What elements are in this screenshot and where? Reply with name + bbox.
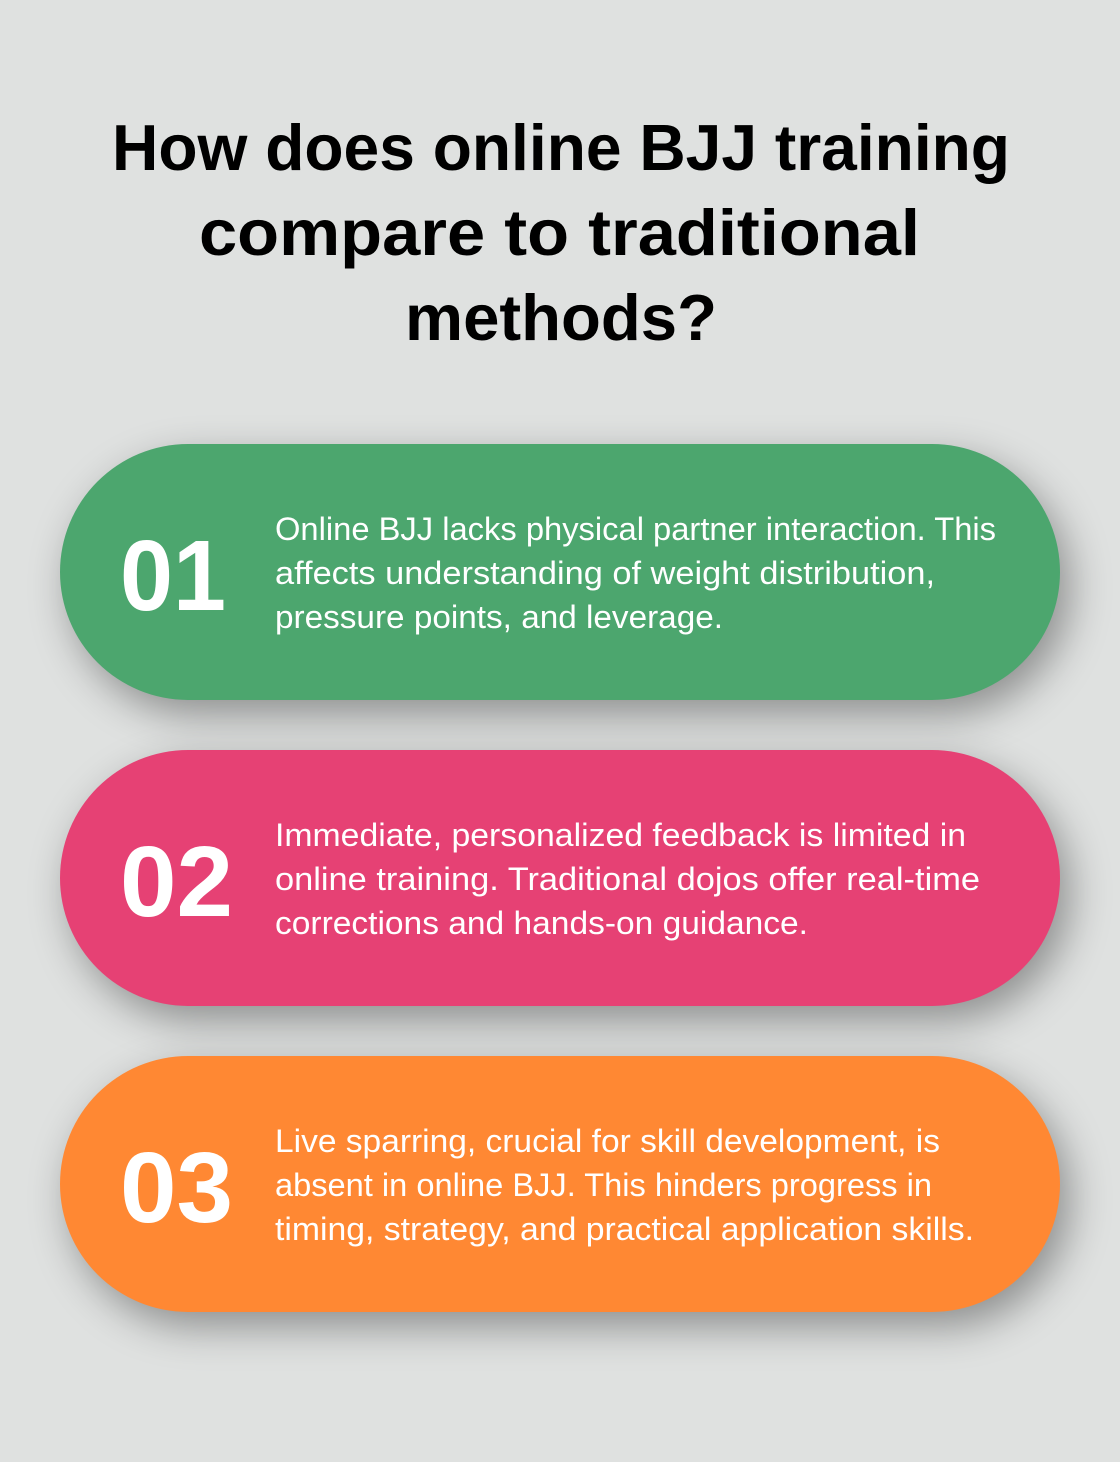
panel: card 03 <box>60 1056 1060 1312</box>
card 03 text: Live sparring, crucial for skill development, is <box>275 1123 940 1159</box>
title: compare to traditional <box>199 196 920 269</box>
card 01 text: affects understanding of weight distribution, <box>275 555 935 591</box>
title: How does online BJJ training <box>112 111 1010 184</box>
card 01 text: pressure points, and leverage. <box>275 599 723 635</box>
number 01: 01 <box>120 520 226 632</box>
card 03 text: absent in online BJJ. This hinders progress in <box>275 1167 932 1203</box>
orange pill background <box>60 1056 1060 1312</box>
green pill background <box>60 444 1060 700</box>
card 02 text <box>275 817 980 941</box>
card 03 text <box>275 1123 974 1247</box>
pink pill background <box>60 750 1060 1006</box>
title: methods? <box>405 281 717 354</box>
card 01 text <box>275 511 996 635</box>
card 01 text: Online BJJ lacks physical partner interaction. This <box>275 511 996 547</box>
card 02 text: online training. Traditional dojos offer real-time <box>275 861 980 897</box>
card 03 text: timing, strategy, and practical application skills. <box>275 1211 974 1247</box>
title <box>112 111 1010 354</box>
number 02: 02 <box>120 826 233 938</box>
card 02 text: corrections and hands-on guidance. <box>275 905 808 941</box>
number 03: 03 <box>120 1132 233 1244</box>
card 02 text: Immediate, personalized feedback is limited in <box>275 817 966 853</box>
panel: card 02 <box>60 750 1060 1006</box>
panel: card 01 <box>60 444 1060 700</box>
